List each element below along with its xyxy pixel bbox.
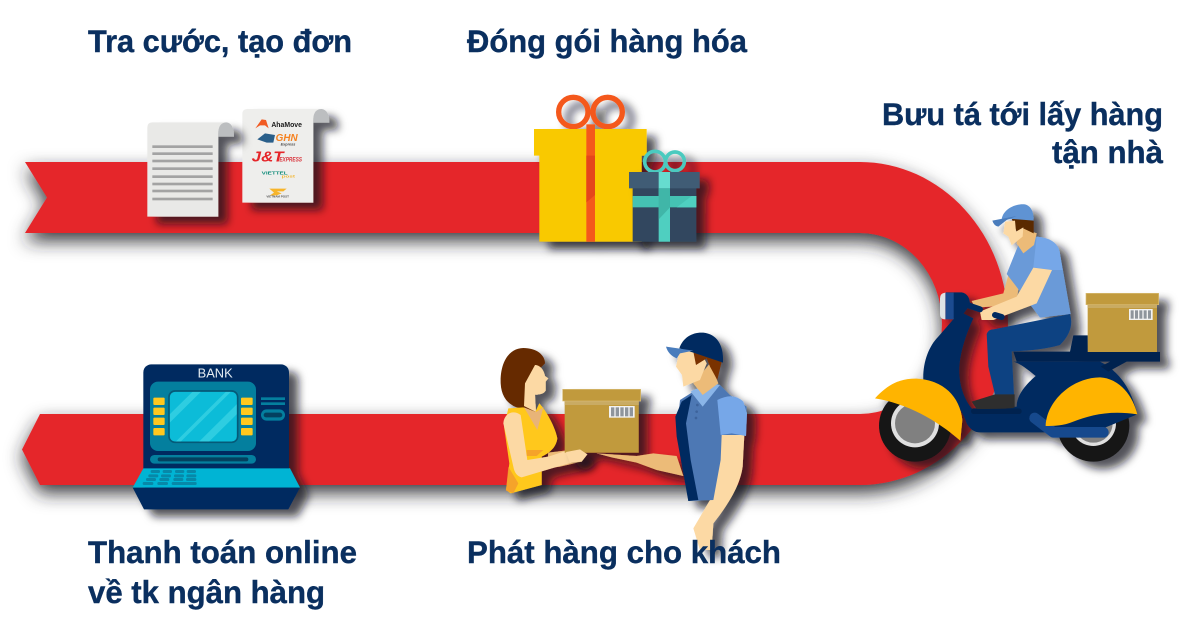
heading: Thanh toán online về tk ngân hàng: về tk ngân hàng [88, 574, 325, 610]
card slots [261, 397, 285, 421]
heading: Thanh toán online về tk ngân hàng [88, 534, 357, 610]
document: lined paper [147, 122, 234, 217]
keyboard tray [133, 468, 300, 488]
scooter and rider [875, 204, 1160, 462]
shoe [972, 394, 1015, 409]
exhaust [1035, 418, 1103, 432]
parcel [563, 389, 641, 453]
courier man [666, 333, 747, 550]
icon: ATM bank machine [133, 364, 300, 509]
near arm [980, 268, 1052, 320]
front wheel [879, 390, 951, 462]
heading: Bưu tá tới lấy hàng tận nhà: Bưu tá tới lấy hàng [882, 96, 1163, 132]
big yellow gift [534, 97, 647, 242]
far arm [972, 275, 1020, 307]
base [133, 488, 300, 509]
document: carrier logos: GHN [276, 133, 298, 144]
face [1003, 221, 1023, 245]
document: carrier logos: J&T [252, 149, 285, 165]
scooter body [923, 312, 1137, 432]
icon: courier on scooter [875, 204, 1160, 462]
front fender [875, 379, 962, 441]
customer woman [501, 348, 587, 493]
document: carrier logos [242, 109, 329, 203]
icon: gift boxes [534, 97, 700, 242]
BANK label: BANK [198, 367, 233, 381]
scene: courier handing parcel to customer [501, 333, 747, 550]
shirt [1007, 237, 1071, 318]
heading: Đóng gói hàng hóa: Đóng gói hàng hóa [467, 23, 747, 59]
heading: Bưu tá tới lấy hàng tận nhà [882, 96, 1163, 170]
rear fender [1046, 377, 1137, 426]
seat and rack [1013, 335, 1160, 372]
ATM cabinet [143, 364, 289, 491]
document: carrier logos: VIETTEL [262, 170, 288, 175]
heading: Phát hàng cho khách: Phát hàng cho khách [467, 534, 781, 570]
pants [987, 314, 1071, 395]
document: carrier logos: Express [281, 143, 295, 147]
document: carrier logos: post [282, 175, 296, 179]
hand under parcel [566, 449, 587, 463]
cash slot [150, 455, 256, 464]
handlebar [969, 306, 1002, 317]
rear wheel [1057, 390, 1129, 462]
heading: Thanh toán online về tk ngân hàng: Thanh toán online [88, 534, 357, 570]
red ribbon road [22, 162, 1008, 485]
hair [1012, 219, 1034, 233]
icon: documents with carrier logos [147, 109, 329, 217]
keypad [143, 470, 197, 485]
small navy gift [629, 151, 700, 242]
foot board [971, 408, 1022, 414]
document: carrier logos: EXPRESS [279, 156, 303, 163]
cap brim [992, 216, 1017, 227]
document: carrier logos: VIETNAM POST [266, 194, 289, 198]
cap [1002, 204, 1034, 221]
neck [1017, 227, 1037, 253]
heading: Tra cước, tạo đơn: Tra cước, tạo đơn [88, 23, 352, 59]
document: carrier logos: AhaMove [271, 122, 302, 129]
heading: Bưu tá tới lấy hàng tận nhà: tận nhà [1052, 134, 1163, 170]
sleeve [1033, 237, 1063, 270]
screen panel [150, 382, 256, 451]
headlight [940, 292, 970, 319]
courier man back arm [563, 389, 683, 476]
parcel on rack [1086, 293, 1159, 352]
